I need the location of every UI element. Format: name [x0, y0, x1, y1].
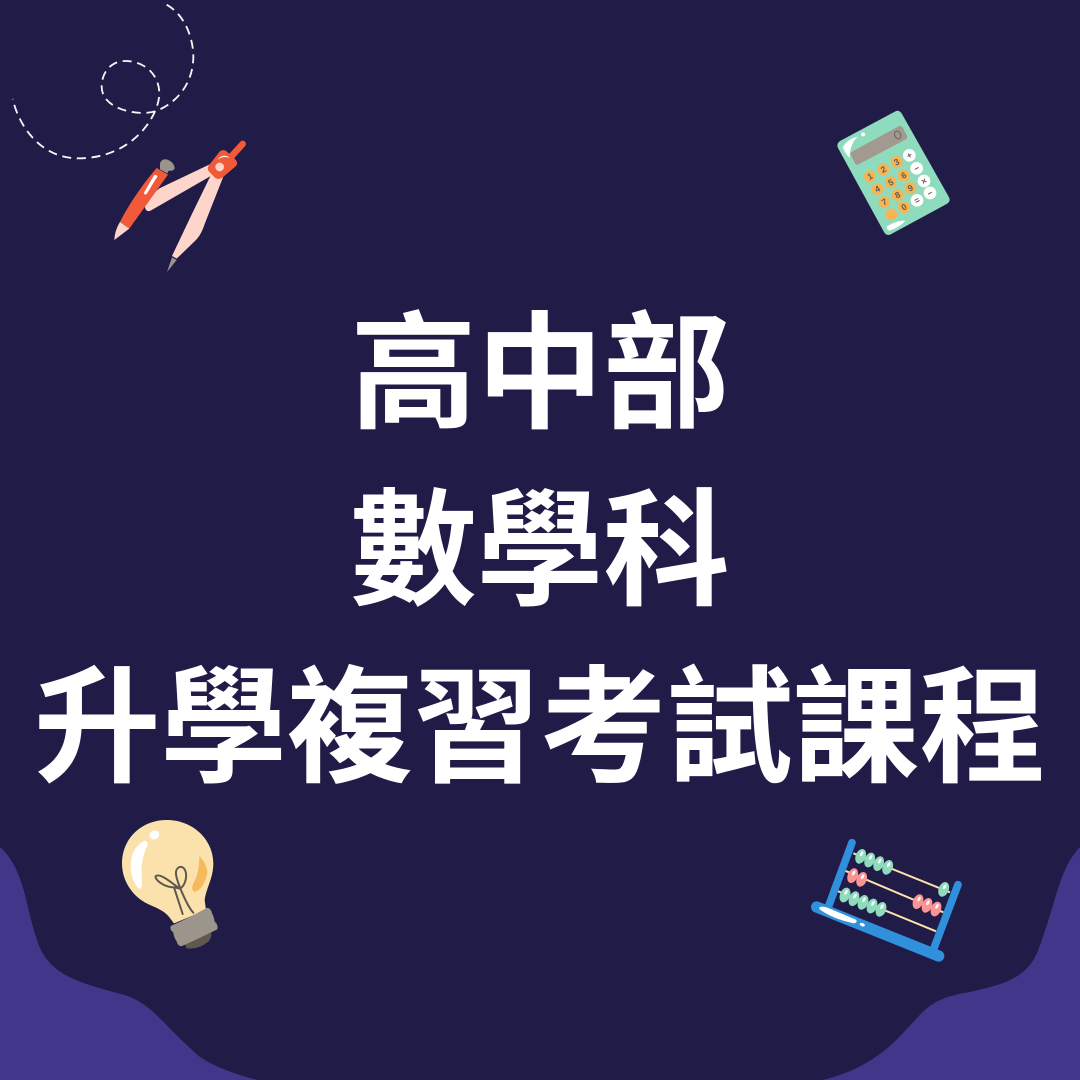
icon: light bulb [122, 820, 218, 949]
icon: calculator: 4 [873, 183, 882, 195]
left corner wave [0, 847, 257, 1080]
icon: calculator: + [905, 150, 914, 161]
title line 2: 數學科 [350, 480, 730, 622]
abacus beads [837, 847, 951, 918]
right corner wave [823, 847, 1080, 1080]
dashed spiral line [13, 5, 193, 158]
icon: calculator: 6 [899, 170, 908, 181]
icon: calculator: 2 [879, 164, 888, 175]
icon: calculator: 9 [906, 182, 915, 194]
icon: calculator: 3 [892, 156, 901, 168]
icon: calculator: 1 [866, 171, 875, 182]
icon: calculator: = [912, 195, 922, 206]
icon: abacus [817, 843, 958, 956]
title [34, 303, 1046, 799]
calculator keys [864, 156, 916, 220]
icon: calculator: 7 [880, 196, 889, 208]
icon: calculator: − [912, 163, 921, 174]
icon: calculator: × [919, 175, 929, 187]
icon: calculator [837, 111, 950, 235]
title line 1: 高中部 [350, 303, 730, 445]
icon: calculator: − [925, 187, 935, 199]
icon: calculator: 0 [900, 201, 909, 213]
icon: compass [114, 140, 246, 272]
icon: calculator: 5 [886, 177, 895, 188]
icon: calculator: 8 [893, 189, 902, 201]
title line 3: 升學複習考試課程 [34, 657, 1046, 799]
